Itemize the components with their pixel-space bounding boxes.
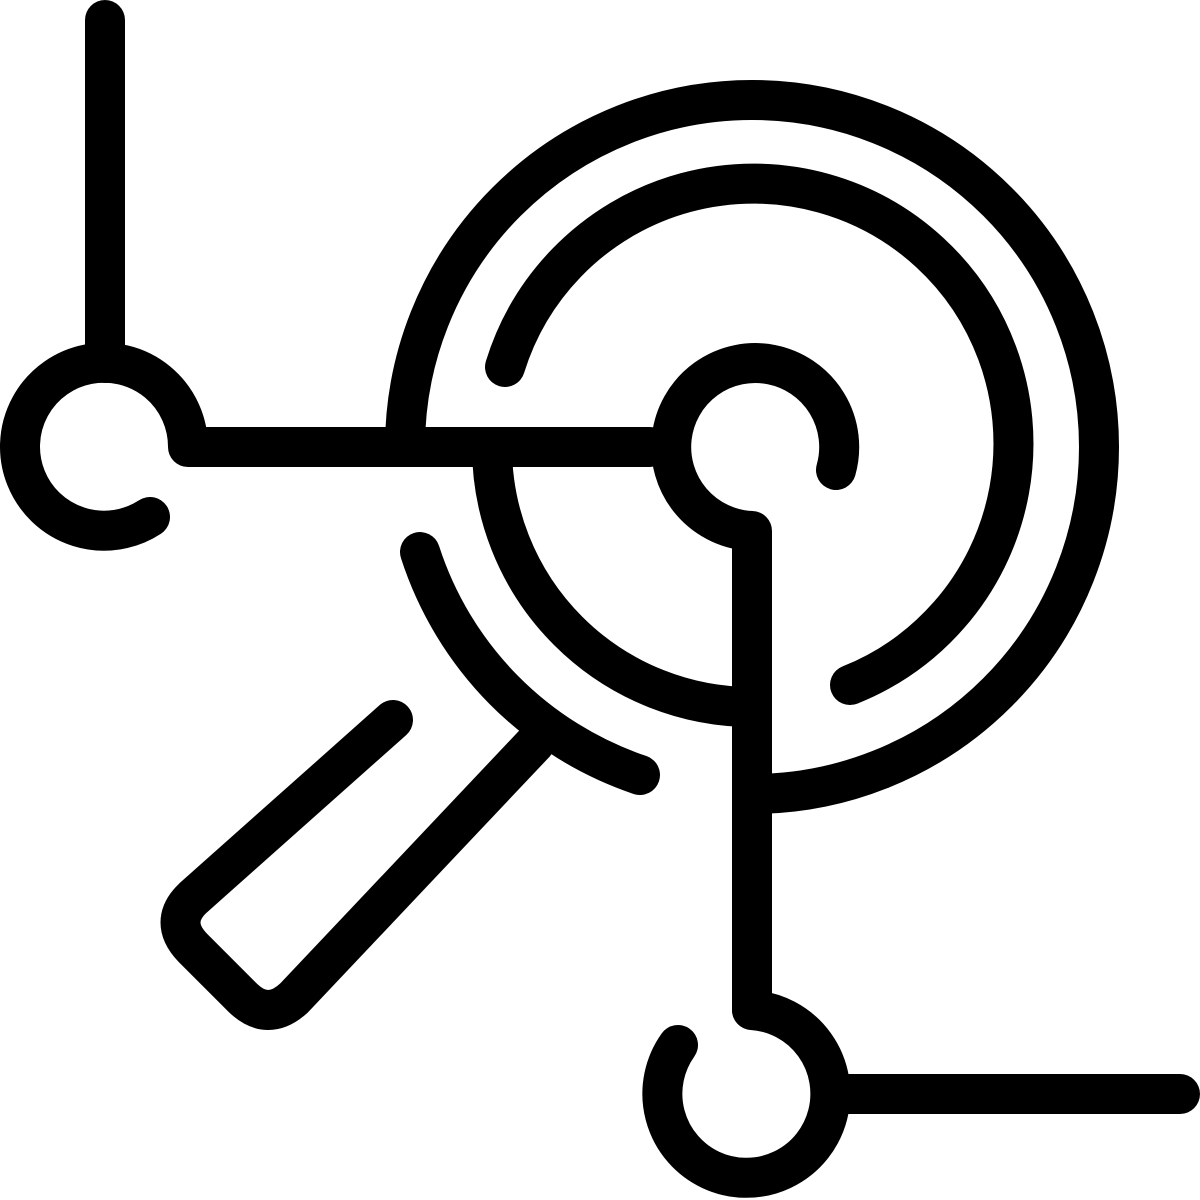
magnifier handle xyxy=(180,720,535,1010)
magnifier lens arc xyxy=(420,552,640,775)
inner lower-left quarter arc xyxy=(492,447,752,707)
bottom ring with horizontal line xyxy=(662,1010,1180,1178)
outer target ring arc xyxy=(405,100,1099,794)
top-left connector: vertical line, ring, horizontal line xyxy=(20,20,650,531)
center ring with vertical line xyxy=(671,363,839,1010)
middle target arc xyxy=(505,184,1013,685)
